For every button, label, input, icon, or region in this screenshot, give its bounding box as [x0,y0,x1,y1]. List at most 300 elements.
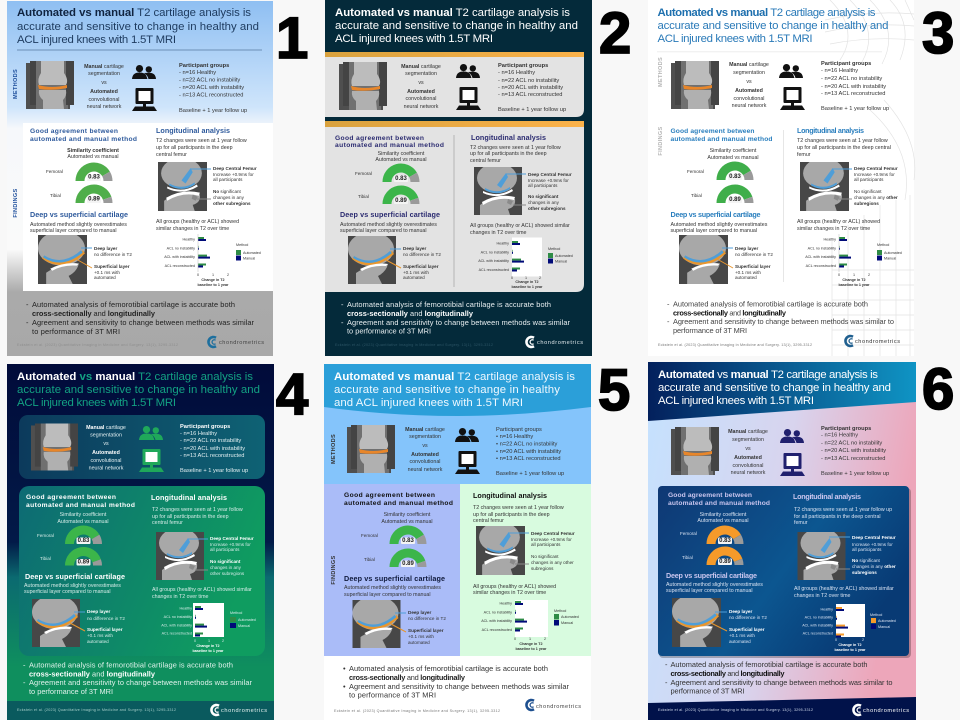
tibial gauge: 0.89 [395,198,407,204]
bar chart: Manual [555,260,567,264]
poster 3 title: accurate and sensitive to change in healthy and [658,20,888,32]
agreement heading: automated and manual method [26,502,135,509]
method comparison text: neural network [408,467,443,473]
bar chart: ACL no instability [808,246,836,250]
poster 4 conclusions: - [23,678,26,687]
agreement heading: Good agreement between [670,128,754,135]
femur callouts: No significant [852,558,881,563]
bar chart: ACL no instability [805,616,833,620]
deep vs superficial text: superficial layer compared to manual [666,588,753,594]
bar chart: Automated [238,618,256,622]
poster 4 logo: chondrometrics [221,708,267,714]
poster 2 conclusions [341,300,571,336]
computer icon [139,449,164,472]
method comparison text: Automated [407,89,435,95]
poster 3: white mesh design [648,0,915,356]
knee layers image [38,231,87,284]
people icon [779,64,803,78]
poster 1 title: accurate and sensitive to change in healthy and [17,21,259,33]
poster 2 logo [526,337,583,347]
bar chart: Change in T2 [196,644,220,648]
all groups text: similar changes in T2 over time [156,226,229,232]
method comparison text: segmentation [733,70,765,76]
bar chart: ACL no instability [164,615,192,619]
poster 6 title: Automated vs manual T2 cartilage analysis is [658,369,878,381]
poster 5 conclusions: Automated analysis of femorotibial cartilage is accurate both [349,664,548,673]
bar chart: ACL reconstructed [479,268,509,272]
participant groups: • n=22 ACL no instability [496,442,558,448]
femur callouts: No significant [528,194,559,199]
bar chart: Automated [561,615,579,619]
method comparison text [401,64,441,110]
layer callouts: +0.1 ms with [87,633,113,638]
similarity label: Similarity coefficient [710,148,757,154]
poster 1 title: Automated vs manual T2 cartilage analysis is [17,7,251,19]
deep vs superficial text: Automated method slightly overestimates [24,583,121,589]
femur callouts: Increase +0.9ms for [213,172,254,177]
method comparison text [728,429,768,476]
femoral gauge: 0.83 [729,174,741,180]
femoral gauge: Femoral [355,171,372,176]
agreement heading [344,492,453,507]
longitudinal text: central femur [470,158,501,164]
method comparison text: Manual cartilage [86,425,126,431]
people icon [139,426,163,440]
deep vs superficial heading: Deep vs superficial cartilage [666,571,757,580]
deep vs superficial heading: Deep vs superficial cartilage [344,574,445,583]
findings label: FINDINGS [13,188,19,218]
bar chart: 1 [525,276,527,280]
method comparison text: convolutional [410,459,440,465]
knee layers image [352,596,400,648]
bar chart: 2 [222,639,224,643]
layer callouts: automated [94,275,116,280]
tibial gauge: Tibial [50,193,61,198]
participant groups: Participant groups [821,426,871,432]
all groups text: similar changes in T2 over time [473,590,546,596]
participant groups: Baseline + 1 year follow up [180,468,248,474]
bar chart: 2 [227,273,229,277]
longitudinal text: T2 changes were seen at 1 year follow [152,507,243,513]
method comparison text: neural network [87,104,122,110]
poster 1 logo [208,337,264,347]
participant groups: • n=13 ACL reconstructed [496,456,561,462]
layer callouts: Superficial layer [735,264,771,269]
participant groups: Baseline + 1 year follow up [821,471,889,477]
knee femur image [800,158,849,211]
longitudinal text [797,138,891,158]
similarity label [697,512,749,524]
poster 1 title [17,7,259,46]
computer icon [780,87,805,110]
deep vs superficial text: superficial layer compared to manual [344,592,431,598]
participant groups [821,61,889,112]
deep vs superficial text [30,222,127,234]
longitudinal heading: Longitudinal analysis [156,126,230,135]
similarity label [67,148,119,160]
layer callouts: +0.1 ms with [729,633,755,638]
poster 2 conclusions: - [341,300,344,309]
similarity label: Automated vs manual [697,518,749,524]
layer callouts [76,246,132,280]
bar chart: Method [877,243,889,247]
all groups text: changes in T2 over time [152,594,208,600]
bar chart: 2 [544,637,546,641]
poster 6 logo [853,705,909,715]
poster 2 findings panel [325,121,584,292]
participant groups: - n=22 ACL no instability [180,438,241,444]
similarity label: Automated vs manual [707,155,759,161]
femur callouts [832,166,898,206]
tibial gauge [691,189,749,203]
longitudinal text [473,505,564,524]
poster 3 background [648,0,914,356]
layer callouts: automated [735,275,757,280]
participant groups: Baseline + 1 year follow up [498,107,566,113]
femur callouts: changes in any [213,195,245,200]
longitudinal text: femur [794,520,808,526]
method comparison text [405,427,445,473]
similarity label [381,512,433,525]
longitudinal text: central femur [473,518,504,524]
tibial gauge [682,551,739,565]
knee layers image [679,231,728,284]
longitudinal text [152,507,243,526]
layer callouts: +0.1 ms with [735,270,761,275]
femur callouts: No significant [531,554,559,559]
bar chart: Change in T2 [515,280,539,284]
tibial gauge [364,553,422,567]
layer callouts: +0.1 ms with [408,634,434,639]
poster 6 citation: Eckstein et al. (2023) Quantitative Imaging in Medicine and Surgery. 13(1), 3295-3312 [658,708,813,712]
femur callouts: changes in any [210,565,242,570]
bar chart: 0 [511,276,513,280]
poster 6 title [658,369,891,407]
agreement heading [30,128,137,143]
longitudinal heading: Longitudinal analysis [151,493,227,502]
tibial gauge [50,189,108,203]
poster 5 background blocks [324,364,591,720]
bar chart: Automated [243,251,261,255]
poster 5 conclusions: to performance of 3T MRI [349,690,436,700]
longitudinal heading: Longitudinal analysis [471,133,546,142]
femur callouts: Increase +0.9ms for [210,542,251,547]
deep vs superficial text: Automated method slightly overestimates [666,582,763,588]
poster 2 conclusions: to performance of 3T MRI [347,326,431,336]
participant groups: - n=16 Healthy [498,70,535,76]
bar chart: Manual [243,256,255,260]
all groups text [156,219,239,232]
longitudinal text: T2 changes were seen at 1 year follow up [794,507,892,513]
knee layers image [32,595,80,647]
layer callouts [717,246,773,280]
bar chart: baseline to 1 year [835,648,866,652]
poster 5 findings section [331,491,579,651]
longitudinal text: T2 changes were seen at 1 year follow [470,145,561,151]
bar chart: ACL reconstructed [165,264,195,268]
deep vs superficial text [340,222,437,234]
method comparison text: convolutional [91,458,121,464]
femur callouts: Deep Central Femur [528,172,572,177]
longitudinal text: for all participants in the deep central [794,514,881,520]
method comparison text: Automated [90,89,118,95]
bar chart: Manual [238,624,250,628]
all groups text: All groups (healthy or ACL) showed similar [794,586,894,592]
femur callouts: all participants [213,177,243,182]
participant groups: - n=22 ACL no instability [821,440,882,446]
femoral gauge: Femoral [46,169,63,174]
bar chart: Healthy [499,602,512,606]
poster 4 conclusions: cross-sectionally and longitudinally [29,670,156,678]
longitudinal text: up for all participants in the deep [156,145,233,151]
poster 4 conclusions: - [23,660,26,670]
all groups text: All groups (healthy or ACL) showed similar [152,587,252,593]
method comparison text: convolutional [733,463,763,469]
longitudinal heading: Longitudinal analysis [473,491,547,500]
bar chart: Healthy [182,238,195,242]
femur callouts [506,172,572,211]
layer callouts: +0.1 ms with [403,270,429,275]
method comparison text: segmentation [405,71,437,77]
method comparison text: segmentation [90,432,122,438]
deep vs superficial text: Automated method slightly overestimates [30,222,127,228]
poster 4 findings panel [19,486,265,656]
poster 1 conclusions: - [26,300,29,309]
knee layers image [672,594,721,647]
bar chart: Healthy [496,242,509,246]
poster 4 conclusions [23,660,253,696]
all groups text [797,219,880,232]
layer callouts [386,246,441,280]
deep vs superficial heading: Deep vs superficial cartilage [340,210,440,219]
deep vs superficial heading: Deep vs superficial cartilage [25,572,125,581]
bar chart: Healthy [823,238,836,242]
femur callouts: changes in any other [854,195,898,200]
poster 3 conclusions [667,300,894,335]
poster 1 conclusions: Automated analysis of femorotibial cartilage is accurate both [32,300,235,309]
participant groups: - n=13 ACL reconstructed [498,92,562,98]
femoral gauge: Femoral [361,533,378,538]
all groups text [794,586,894,599]
layer callouts: Superficial layer [403,264,439,269]
method comparison text: vs [103,441,109,447]
bar chart: baseline to 1 year [198,283,229,287]
poster 3 title: ACL injured knees with 1.5T MRI [658,33,812,45]
femoral gauge: 0.83 [395,176,407,182]
poster 6 footer band [648,697,916,720]
bar chart: Change in T2 [838,643,862,647]
femur callouts: all participants [852,547,882,552]
layer callouts: Deep layer [408,610,431,615]
poster 5 title: Automated vs manual T2 cartilage analysis is [334,371,575,383]
deep vs superficial text [666,582,763,594]
femoral gauge: Femoral [687,169,704,174]
poster 6 background [648,362,916,720]
poster 2 conclusions: Automated analysis of femorotibial cartilage is accurate both [347,300,551,309]
method comparison text: Manual cartilage [401,64,441,70]
poster 5 conclusions: • [343,682,346,691]
poster 6 conclusions [665,660,892,696]
tibial gauge: 0.89 [719,559,731,565]
bar chart: 0 [197,273,199,277]
method comparison text: neural network [404,104,439,110]
poster 5 conclusions: Agreement and sensitivity to change between methods was similar [349,682,570,691]
all groups text [152,587,252,600]
method comparison text: segmentation [732,437,764,443]
poster 5 conclusions: • [343,664,346,673]
participant groups: Participant groups [179,63,229,69]
agreement heading [335,135,444,149]
method comparison text: vs [422,443,428,449]
femur callouts: subregions [852,570,877,575]
femur callouts: subregions [854,201,879,206]
bar chart: Automated [555,254,573,258]
longitudinal text: T2 changes were seen at 1 year follow [156,138,247,144]
poster 3 logo: chondrometrics [855,339,900,345]
tibial gauge: Tibial [40,556,51,561]
bar chart: 1 [212,273,214,277]
participant groups: - n=13 ACL reconstructed [821,91,885,97]
tibial gauge [358,190,415,204]
knee femur image [474,163,522,215]
agreement heading: Good agreement between [30,128,118,135]
people icon [780,429,804,443]
tibial gauge: 0.89 [78,560,90,566]
all groups text: All groups (healthy or ACL) showed similar [470,223,570,229]
poster 5 title: and ACL injured knees with 1.5T MRI [334,397,523,409]
method comparison text: Manual cartilage [729,62,769,68]
femur callouts: all participants [531,542,561,547]
poster 2 title: ACL injured knees with 1.5T MRI [335,33,493,45]
deep vs superficial text: Automated method slightly overestimates [670,222,768,228]
method comparison text: Manual cartilage [405,427,445,433]
poster 1 conclusions: to performance of 3T MRI [32,327,120,336]
poster 2 title [335,7,578,45]
deep vs superficial text: Automated method slightly overestimates [340,222,437,228]
similarity label: Automated vs manual [375,157,427,163]
participant groups [821,426,889,477]
bar chart: 1 [853,273,855,277]
poster 6 logo: chondrometrics [863,708,909,714]
knee femur image [158,158,207,211]
participant groups: Baseline + 1 year follow up [496,471,564,477]
poster 5 title [334,371,575,409]
layer callouts: Superficial layer [729,627,765,632]
layer callouts [391,610,446,645]
femur callouts: No significant [854,189,882,194]
femur callouts: other subregions [213,201,251,206]
poster 6 conclusions: - [665,678,668,687]
poster 3 conclusions: Agreement and sensitivity to change between methods was similar to [673,317,894,326]
poster 1 conclusions: Agreement and sensitivity to change between methods was similar [32,318,255,327]
bar chart [805,234,902,287]
layer callouts: no difference in T2 [403,252,441,257]
people icon [456,64,480,78]
bar chart: 0 [835,638,837,642]
longitudinal text: femur [797,152,811,158]
agreement heading [670,128,772,143]
all groups text: All groups (healthy or ACL) showed [156,219,239,225]
deep vs superficial text: superficial layer compared to manual [340,228,427,234]
poster 2 citation: Eckstein et al. (2023) Quantitative Imaging in Medicine and Surgery. 13(1), 3295-3312 [335,343,493,347]
knee MRI icon [347,425,395,473]
poster 6 conclusions: Automated analysis of femorotibial cartilage is accurate both [670,660,868,669]
poster 4 title: ACL injured knees with 1.5T MRI [17,397,176,409]
femur callouts [829,535,896,575]
participant groups: - n=20 ACL with instability [498,85,563,91]
poster 6 findings panel [658,486,911,658]
layer callouts: no difference in T2 [94,252,132,257]
deep vs superficial heading: Deep vs superficial cartilage [30,210,128,219]
femur callouts [188,536,254,576]
all groups text: changes in T2 over time [794,593,850,599]
poster 2 title: Automated vs manual T2 cartilage analysis is [335,7,570,19]
agreement heading: automated and manual method [344,500,453,507]
bar chart: Automated [884,251,902,255]
poster 6 header band [648,362,916,421]
poster 6 methods section [671,426,889,477]
participant groups: - n=20 ACL with instability [180,446,245,452]
participant groups [179,63,247,114]
agreement heading: automated and manual method [668,500,770,507]
people icon [455,428,479,442]
participant groups: • n=16 Healthy [496,434,533,440]
poster 2 conclusions: cross-sectionally and longitudinally [347,309,474,318]
poster 4 title: Automated vs manual T2 cartilage analysis is [17,371,253,383]
femoral gauge: 0.83 [719,538,731,544]
longitudinal heading: Longitudinal analysis [793,492,861,501]
bar chart: ACL reconstructed [482,628,512,632]
method comparison text: segmentation [409,434,441,440]
femur callouts: Increase +0.9ms for [528,178,569,183]
all groups text: similar changes in T2 over time [797,226,870,232]
number 2: 2 [599,1,631,66]
similarity label: Similarity coefficient [700,512,747,518]
number 1: 1 [276,6,308,71]
poster 1 conclusions: - [26,318,29,327]
similarity label: Similarity coefficient [67,148,119,154]
poster 2 methods panel [325,52,584,117]
agreement heading: Good agreement between [668,492,752,499]
similarity label: Automated vs manual [67,154,119,160]
method comparison text: Automated [411,452,439,458]
femur callouts: Increase +0.9ms for [854,172,895,177]
methods label: METHODS [331,434,337,464]
people icon [132,65,156,79]
method comparison text [729,62,769,109]
femoral gauge: 0.83 [78,538,90,544]
bar chart: 0 [514,637,516,641]
findings label: FINDINGS [331,555,337,585]
layer callouts: Superficial layer [94,264,130,269]
participant groups: - n=22 ACL no instability [821,76,882,82]
method comparison text: Manual cartilage [728,429,768,435]
poster 5: pastel blocks design [324,364,591,720]
poster 3 citation: Eckstein et al. (2023) Quantitative Imaging in Medicine and Surgery. 13(1), 3295-3312 [658,343,812,347]
femur callouts [190,166,257,206]
layer callouts: Deep layer [403,246,426,251]
knee MRI icon [671,61,719,109]
bar chart: 0 [838,273,840,277]
poster 4: navy and green design [7,364,274,720]
poster 2 conclusions: - [341,318,344,327]
method comparison text: vs [746,79,752,85]
agreement heading: automated and manual method [30,136,137,143]
tibial gauge: Tibial [358,194,369,199]
participant groups: • n=20 ACL with instability [496,449,561,455]
layer callouts: Deep layer [735,246,758,251]
femur callouts: all participants [854,177,884,182]
